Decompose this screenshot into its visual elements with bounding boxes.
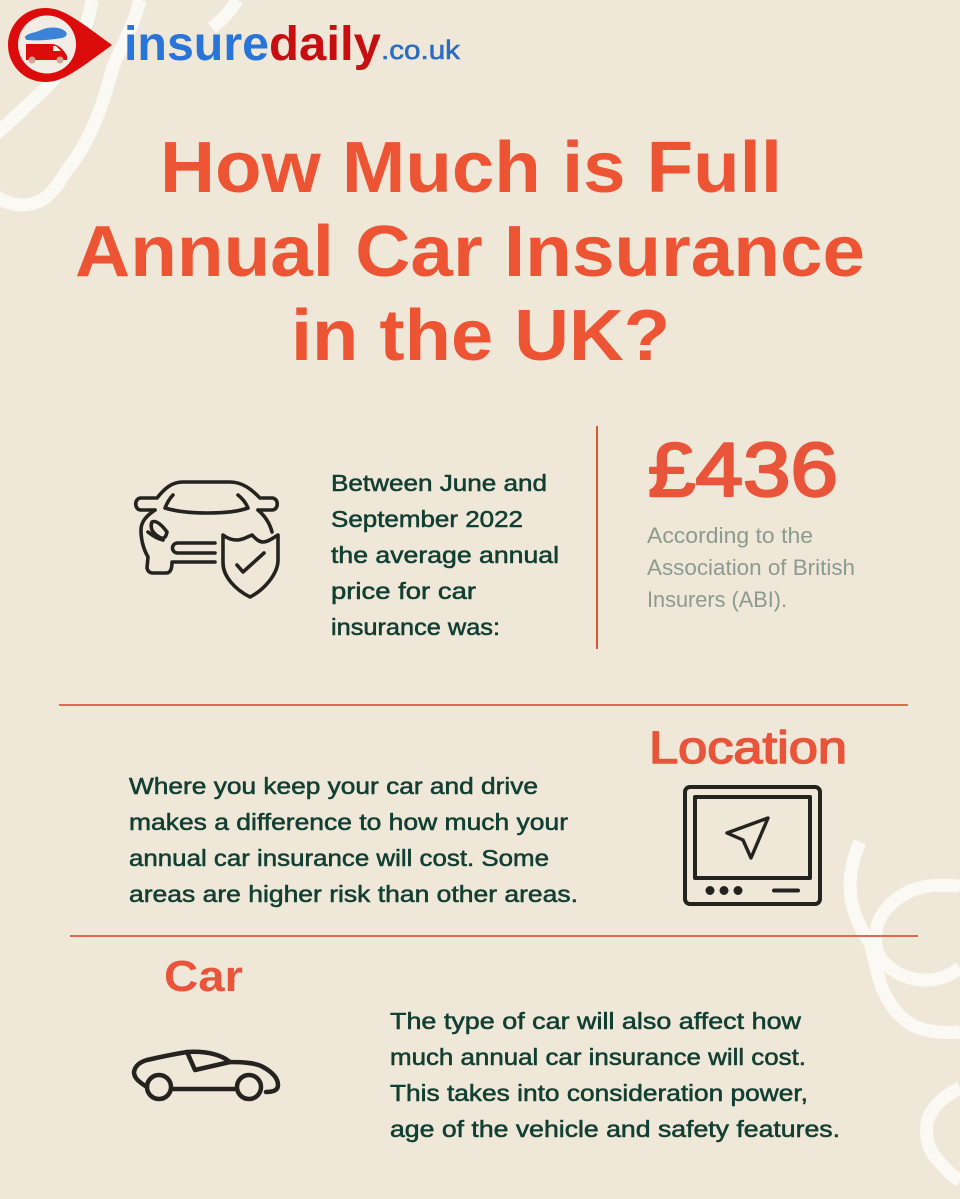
intro text: September 2022 (331, 506, 523, 532)
car text: The type of car will also affect how (390, 1008, 801, 1034)
logo wordmark: daily (269, 18, 381, 71)
logo pin icon (8, 8, 112, 82)
location text: areas are higher risk than other areas. (129, 881, 578, 907)
car text: much annual car insurance will cost. (390, 1044, 806, 1070)
title: How Much is Full (160, 128, 782, 208)
car text: age of the vehicle and safety features. (390, 1116, 840, 1142)
location text: annual car insurance will cost. Some (129, 845, 549, 871)
title (75, 128, 865, 376)
intro text: Between June and (331, 470, 547, 496)
location text (129, 773, 578, 907)
car text (390, 1008, 840, 1142)
logo (8, 8, 461, 82)
title: in the UK? (291, 296, 670, 376)
logo wordmark: insure (124, 18, 269, 71)
location text: makes a difference to how much your (129, 809, 568, 835)
intro text: price for car (331, 578, 476, 604)
ABI source: Association of British (647, 555, 855, 580)
ABI source: Insurers (ABI). (647, 587, 787, 612)
price figure: £436 (648, 428, 838, 513)
heading: Car: Car (164, 952, 243, 1001)
intro text (331, 470, 559, 640)
ABI source: According to the (647, 523, 813, 548)
vertical divider (596, 426, 598, 649)
icon: sat nav screen (685, 787, 820, 904)
title: Annual Car Insurance (75, 212, 865, 292)
ABI source (647, 523, 855, 612)
location text: Where you keep your car and drive (129, 773, 538, 799)
intro text: insurance was: (331, 614, 500, 640)
car text: This takes into consideration power, (390, 1080, 808, 1106)
icon: sports car (134, 1052, 278, 1099)
logo domain: .co.uk (381, 35, 461, 65)
heading: Location: Location (649, 722, 847, 773)
intro text: the average annual (331, 542, 559, 568)
icon: car with shield (136, 482, 278, 597)
